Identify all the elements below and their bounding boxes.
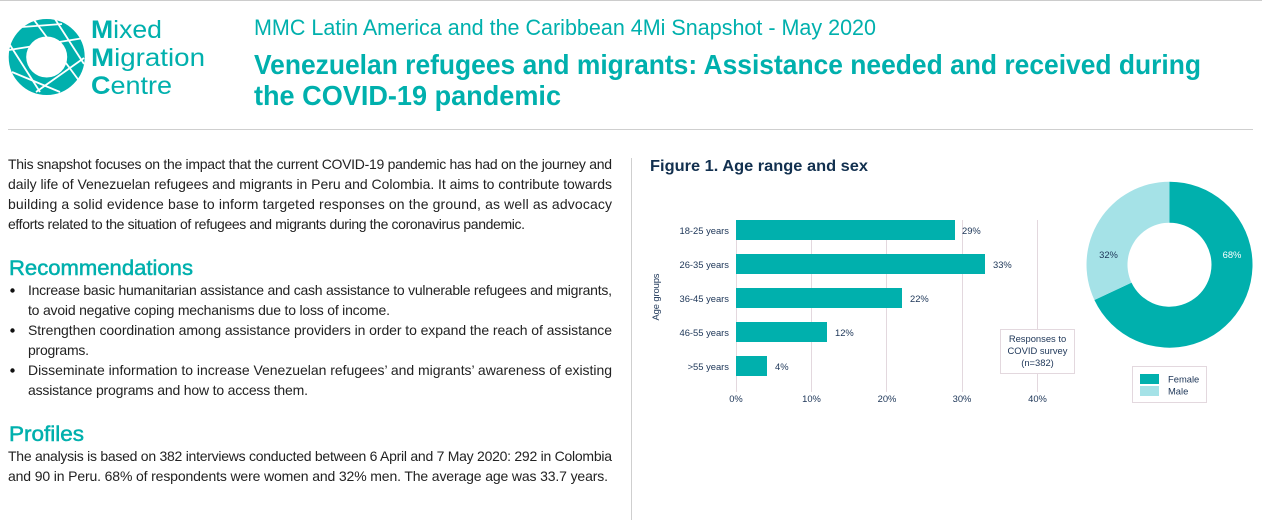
logo wordmark <box>91 16 205 100</box>
callout: responses to survey: (n=382) <box>1021 357 1054 368</box>
label: 68%: 68% <box>1223 249 1241 260</box>
callout: responses to survey <box>1000 330 1074 374</box>
legend: Male <box>1168 386 1188 396</box>
recommendations list: Strengthen coordination among assistance providers in order to expand the reach of assistance <box>28 322 612 338</box>
category labels <box>679 225 729 372</box>
logo wordmark: Mixed <box>91 16 162 44</box>
main title: Venezuelan refugees and migrants: Assistance needed and received during <box>254 49 1201 80</box>
callout: responses to survey: COVID survey <box>1008 345 1068 356</box>
intro paragraph <box>8 156 612 232</box>
profiles paragraph: and 90 in Peru. 68% of respondents were women and 32% men. The average age was 33.7 years. <box>8 468 608 484</box>
recommendations list: to avoid negative coping mechanisms due to loss of income. <box>28 302 390 318</box>
recommendations list: Increase basic humanitarian assistance and cash assistance to vulnerable refugees and migrants, <box>28 282 612 298</box>
value labels: 12% <box>835 327 854 338</box>
value labels: 22% <box>910 293 929 304</box>
y axis title: Age groups <box>650 273 661 320</box>
main title: the COVID-19 pandemic <box>254 80 561 111</box>
logo wordmark: Migration <box>91 44 205 72</box>
intro paragraph: This snapshot focuses on the impact that the current COVID-19 pandemic has had on the journey and <box>8 156 612 172</box>
callout: responses to survey: Responses to <box>1009 333 1066 344</box>
bar chart: age groups <box>650 220 1047 404</box>
figure title: Figure 1. Age range and sex <box>650 158 868 175</box>
recommendations list: programs. <box>28 342 89 358</box>
recommendations list <box>10 282 612 398</box>
bars <box>736 220 985 376</box>
legend <box>1132 366 1206 402</box>
x axis labels: 40% <box>1028 393 1047 404</box>
x axis labels: 10% <box>802 393 821 404</box>
profiles paragraph <box>8 448 612 484</box>
slice: male 32% <box>1087 182 1170 300</box>
x axis labels: 0% <box>729 393 743 404</box>
icon: ring of crossing lines <box>9 19 84 92</box>
category labels: 36-45 years <box>679 293 729 304</box>
value labels: 4% <box>775 361 789 372</box>
intro paragraph: efforts related to the situation of refugees and migrants during the coronavirus pandemic. <box>8 216 525 232</box>
value labels: 33% <box>993 259 1012 270</box>
heading: recommendations: Recommendations <box>9 257 193 280</box>
x axis labels <box>729 393 1047 404</box>
logo wordmark: Centre <box>91 72 172 100</box>
category labels: 26-35 years <box>679 259 729 270</box>
value labels <box>775 225 1012 372</box>
label: 32%: 32% <box>1099 249 1118 260</box>
category labels: 18-25 years <box>679 225 729 236</box>
legend: Female <box>1168 374 1199 384</box>
slice: female 68% <box>1094 182 1253 348</box>
intro paragraph: building a solid evidence base to inform targeted responses on the ground, as well as advocacy <box>8 196 612 212</box>
category labels: 46-55 years <box>679 327 729 338</box>
x axis labels: 20% <box>878 393 896 404</box>
profiles paragraph: The analysis is based on 382 interviews conducted between 6 April and 7 May 2020: 292 in Colombia <box>8 448 612 464</box>
recommendations list: assistance programs and how to access them. <box>28 382 308 398</box>
category labels: >55 years <box>688 361 729 372</box>
logo: Mixed Migration Centre <box>9 16 205 100</box>
heading: profiles: Profiles <box>9 423 84 446</box>
recommendations list: Disseminate information to increase Venezuelan refugees’ and migrants’ awareness of existing <box>28 362 612 378</box>
intro paragraph: daily life of Venezuelan refugees and migrants in Peru and Colombia. It aims to contribute towards <box>8 176 612 192</box>
snapshot subtitle: MMC Latin America and the Caribbean 4Mi Snapshot - May 2020 <box>254 15 876 40</box>
main title <box>254 49 1201 111</box>
value labels: 29% <box>962 225 981 236</box>
donut chart: sex <box>1087 182 1253 348</box>
x axis labels: 30% <box>953 393 971 404</box>
